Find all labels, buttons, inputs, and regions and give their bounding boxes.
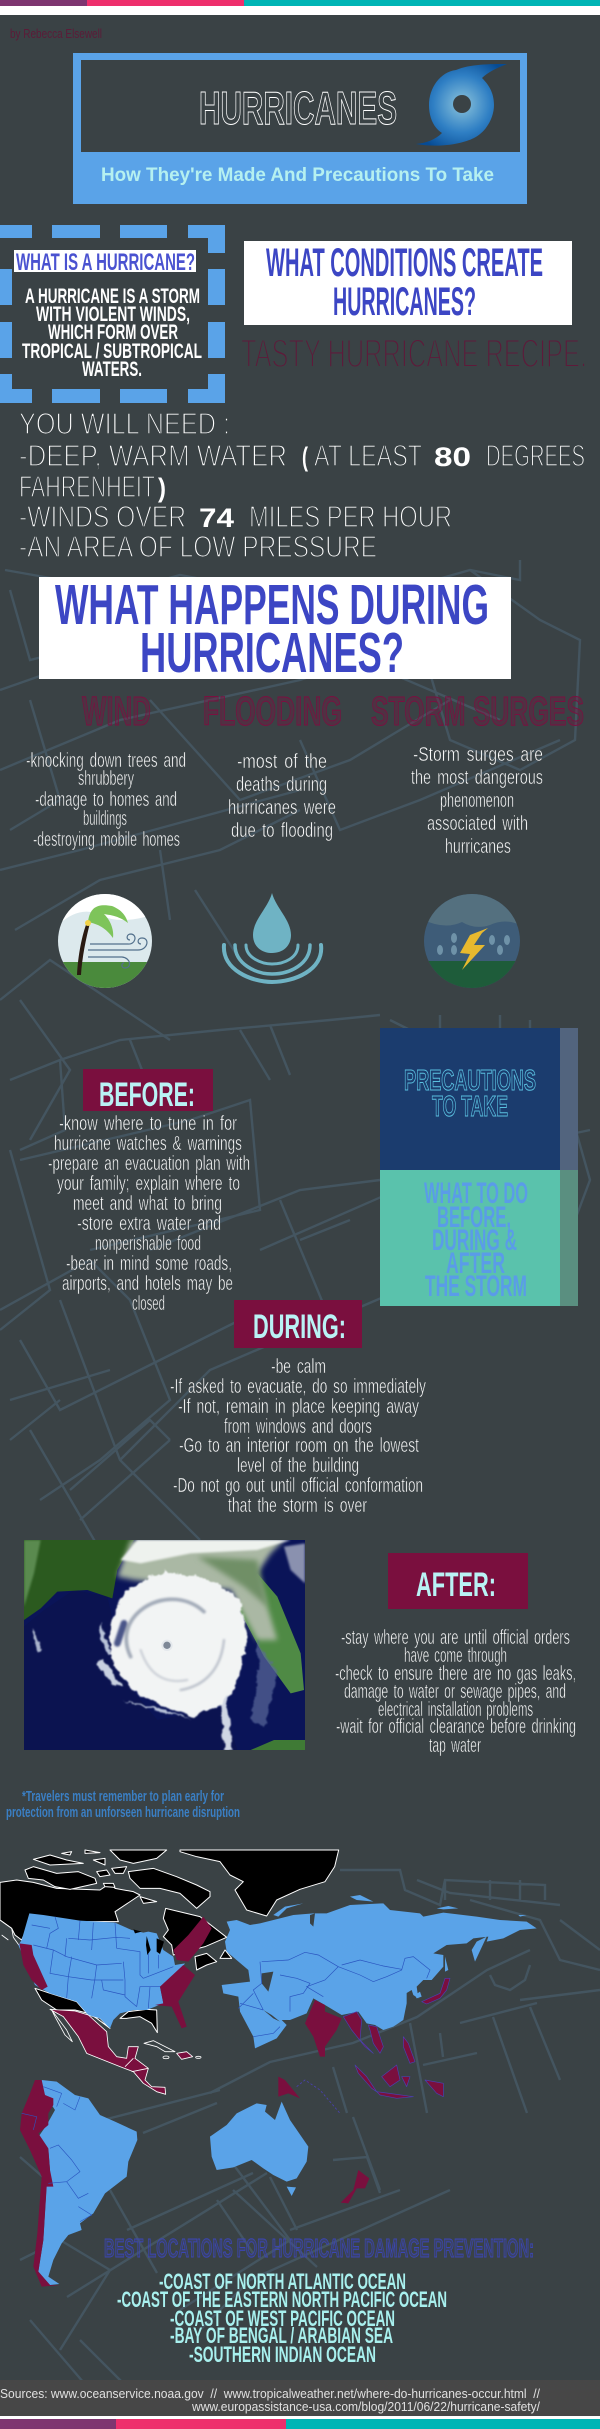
recipe list: 80 bbox=[434, 442, 471, 472]
text: during list: -Do not go out until official conformation bbox=[173, 1475, 423, 1497]
heading: WHAT IS A HURRICANE? bbox=[16, 249, 195, 276]
heading: during: DURING: bbox=[253, 1308, 346, 1346]
heading: after: AFTER: bbox=[416, 1566, 496, 1604]
icon: water drop and ripples bbox=[224, 893, 321, 982]
map: maroon south and south-east Asia bbox=[278, 1978, 450, 2098]
text: flooding effects: due to flooding bbox=[231, 820, 333, 842]
map: South America bbox=[37, 2080, 137, 2285]
recipe list bbox=[19, 406, 585, 564]
title: HURRICANES bbox=[199, 82, 397, 134]
list: best locations: -COAST OF WEST PACIFIC OCEAN bbox=[170, 2306, 395, 2331]
text: before list: your family; explain where to bbox=[57, 1173, 240, 1195]
heading: before bbox=[83, 1069, 213, 1114]
text: storm surge effects: -Storm surges are bbox=[413, 744, 543, 766]
panel subtitle: AFTER bbox=[446, 1247, 505, 1280]
recipe list: YOU WILL NEED : bbox=[19, 406, 230, 441]
panel: what is a hurricane bbox=[0, 225, 225, 403]
text: before list: meet and what to bring bbox=[73, 1193, 222, 1215]
definition text: TROPICAL / SUBTROPICAL bbox=[22, 340, 202, 363]
column headings: wind, flooding, storm surges: WIND bbox=[82, 688, 151, 734]
text: before list: closed bbox=[132, 1293, 165, 1315]
recipe list: FAHRENHEIT bbox=[19, 469, 155, 504]
panel subtitle bbox=[424, 1177, 528, 1303]
satellite image of hurricane bbox=[24, 1540, 305, 1750]
text: wind effects: -destroying mobile homes bbox=[33, 829, 180, 851]
author byline: by Rebecca Elsewell bbox=[10, 26, 102, 41]
heading bbox=[14, 249, 196, 276]
definition text: WITH VIOLENT WINDS, bbox=[36, 303, 190, 326]
recipe list: 74 bbox=[199, 503, 234, 533]
panel: precautions to take bbox=[380, 1028, 578, 1306]
text: wind effects bbox=[26, 750, 186, 851]
text: before list: -prepare an evacuation plan with bbox=[48, 1153, 250, 1175]
sources footer: Sources: www.oceanservice.noaa.gov // www.tropicalweather.net/where-do-hurricanes-occur.html // bbox=[0, 2387, 541, 2401]
heading: during bbox=[234, 1300, 362, 1348]
top colour bar bbox=[0, 0, 600, 15]
heading: what happens during hurricanes bbox=[39, 573, 511, 685]
text: during list: that the storm is over bbox=[228, 1495, 367, 1517]
text: before list: -bear in mind some roads, bbox=[66, 1253, 232, 1275]
text: flooding effects: deaths during bbox=[236, 774, 327, 796]
text: storm surge effects: phenomenon bbox=[440, 790, 514, 812]
world map bbox=[0, 1850, 537, 2287]
icon: hurricane symbol bbox=[416, 64, 507, 146]
text: during list: level of the building bbox=[237, 1455, 359, 1477]
heading: before: BEFORE: bbox=[99, 1076, 195, 1114]
text: storm surge effects bbox=[411, 744, 543, 858]
text: before list: hurricane watches & warnings bbox=[54, 1133, 242, 1155]
icon: thunderstorm bbox=[424, 890, 520, 991]
travelers note: protection from an unforseen hurricane disruption bbox=[6, 1804, 240, 1821]
column headings: wind, flooding, storm surges bbox=[82, 688, 584, 734]
text: during list: -be calm bbox=[271, 1356, 326, 1378]
text: during list: -If asked to evacuate, do so immediately bbox=[170, 1376, 426, 1398]
map: Australia bbox=[210, 2102, 308, 2182]
panel subtitle: BEFORE, bbox=[437, 1201, 511, 1234]
definition text: WHICH FORM OVER bbox=[48, 321, 178, 344]
text: wind effects: -knocking down trees and bbox=[26, 750, 186, 772]
panel subtitle: DURING & bbox=[432, 1224, 517, 1257]
text: after list: tap water bbox=[429, 1735, 481, 1757]
text: during list: -Go to an interior room on the lowest bbox=[179, 1435, 419, 1457]
recipe list: -DEEP, WARM WATER bbox=[19, 438, 287, 473]
list: best locations bbox=[117, 2269, 447, 2367]
text: wind effects: -damage to homes and bbox=[35, 789, 177, 811]
text: after list: have come through bbox=[404, 1645, 507, 1667]
travelers note bbox=[6, 1788, 240, 1821]
title panel bbox=[73, 53, 527, 204]
text: storm surge effects: associated with bbox=[427, 813, 528, 835]
panel title: TO TAKE bbox=[432, 1091, 508, 1123]
list: best locations: -COAST OF NORTH ATLANTIC OCEAN bbox=[159, 2269, 406, 2294]
text: during list bbox=[170, 1356, 426, 1517]
travelers note: *Travelers must remember to plan early for bbox=[22, 1788, 224, 1805]
definition text: WATERS. bbox=[82, 358, 142, 381]
list: best locations: -SOUTHERN INDIAN OCEAN bbox=[189, 2342, 376, 2367]
text: during list: from windows and doors bbox=[224, 1416, 372, 1438]
panel subtitle: THE STORM bbox=[425, 1270, 527, 1303]
column headings: wind, flooding, storm surges: FLOODING bbox=[203, 688, 342, 734]
recipe list: ( bbox=[302, 442, 308, 472]
text: wind effects: buildings bbox=[83, 808, 127, 830]
panel title bbox=[404, 1065, 536, 1123]
text: before list: -know where to tune in for bbox=[59, 1113, 237, 1135]
recipe list: -WINDS OVER bbox=[19, 499, 186, 534]
icon: wind and palm tree bbox=[58, 890, 152, 992]
text: storm surge effects: hurricanes bbox=[445, 836, 511, 858]
map: Mexico and Caribbean bbox=[50, 2009, 201, 2094]
text: before list: airports, and hotels may be bbox=[62, 1273, 233, 1295]
map: maroon coasts of the United States bbox=[19, 1917, 212, 2028]
heading: what conditions create hurricanes bbox=[244, 241, 572, 325]
bottom colour bar bbox=[0, 2416, 600, 2429]
text: during list: -If not, remain in place keeping away bbox=[178, 1396, 419, 1418]
heading: what happens during hurricanes: HURRICANES? bbox=[140, 621, 404, 685]
recipe list: -AN AREA OF LOW PRESSURE bbox=[19, 529, 377, 564]
text: storm surge effects: the most dangerous bbox=[411, 767, 543, 789]
recipe list: ) bbox=[158, 473, 166, 503]
sources footer: www.europassistance-usa.com/blog/2011/06/22/hurricane-safety/ bbox=[191, 2400, 541, 2414]
map: Americas and Australia bbox=[0, 1850, 369, 2287]
map: New Zealand bbox=[341, 2170, 369, 2203]
text: flooding effects bbox=[228, 751, 336, 842]
text: flooding effects: -most of the bbox=[237, 751, 327, 773]
map: United States bbox=[18, 1913, 185, 2028]
subtitle: How They're Made And Precautions To Take bbox=[101, 165, 494, 186]
sources footer bbox=[0, 2380, 600, 2416]
heading: after bbox=[388, 1553, 528, 1609]
definition text: A HURRICANE IS A STORM bbox=[25, 285, 200, 308]
map: Eurasia bbox=[222, 1895, 537, 2113]
text: wind effects: shrubbery bbox=[78, 768, 134, 790]
list: best locations: -BAY OF BENGAL / ARABIAN SEA bbox=[170, 2323, 393, 2348]
recipe list: AT LEAST bbox=[314, 438, 422, 473]
text: flooding effects: hurricanes were bbox=[228, 797, 336, 819]
text: before list bbox=[48, 1113, 250, 1315]
text: after list bbox=[335, 1627, 576, 1757]
definition text bbox=[22, 285, 202, 381]
map: Asian borders bbox=[238, 1952, 430, 2037]
text: before list: -store extra water and bbox=[77, 1213, 221, 1235]
recipe list: MILES PER HOUR bbox=[249, 499, 452, 534]
text: before list: nonperishable food bbox=[95, 1233, 201, 1255]
